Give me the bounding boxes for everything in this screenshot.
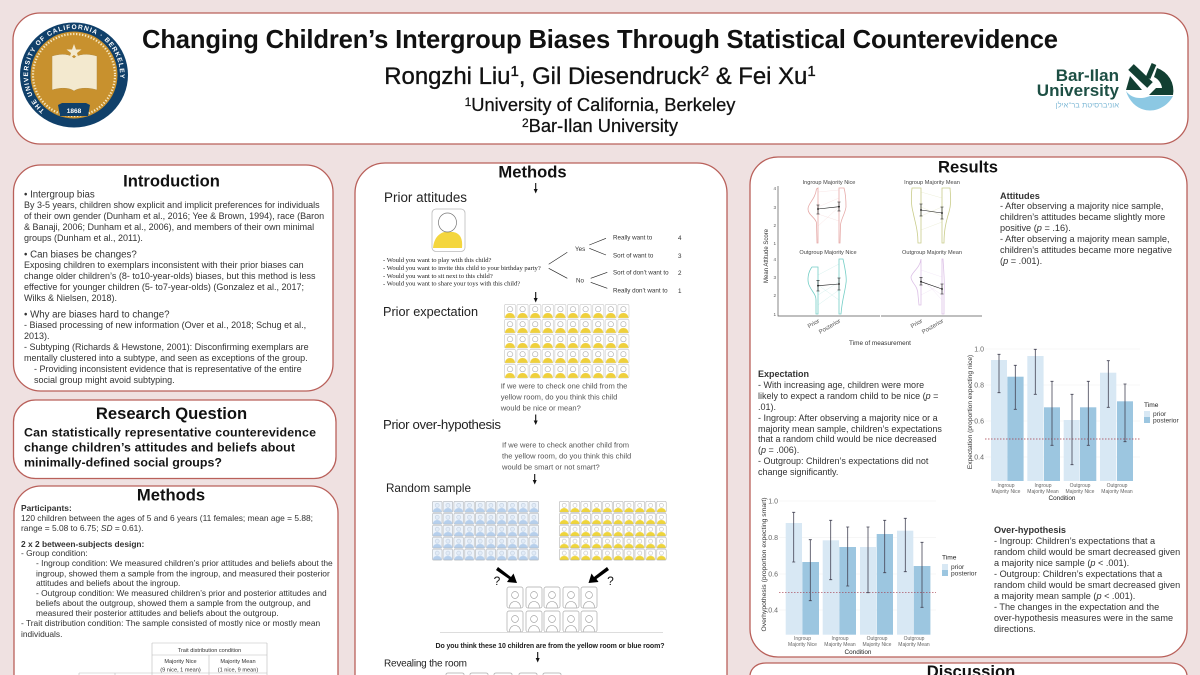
means and error bars: [816, 202, 944, 294]
y axis ticks: 1: [773, 241, 776, 246]
diagram: response scale tree: Really don’t want to: [613, 288, 668, 294]
text block: intergroup bias: groups (Dunham et al., 2011).: [24, 233, 143, 243]
legend: prior: [951, 564, 965, 571]
authors: , Gil Diesendruck: [519, 63, 701, 90]
y axis label: Mean Attitude Score: [764, 228, 770, 283]
text block: expectation results: change significantly.: [758, 467, 838, 477]
text block: over-hypothesis results: a majority mean sample (p < .001).: [994, 591, 1135, 601]
authors: 1: [510, 63, 519, 80]
legend: posterior: [1153, 418, 1179, 424]
category labels: Ingroup: [998, 483, 1015, 489]
category labels: Majority Nice: [788, 642, 817, 648]
legend: Time: [942, 554, 957, 562]
x axis tick labels: Posterior: [921, 319, 945, 336]
authors: Rongzhi Liu: [384, 63, 510, 90]
y axis ticks: 2: [773, 223, 776, 228]
text block: attitudes results: - After observing a majority nice sample,: [1000, 201, 1163, 211]
text block: attitude questions: - Would you want to play with this child?: [383, 257, 492, 264]
diagram: response scale tree: Yes: [575, 246, 585, 253]
label: random sample: Random sample: [386, 482, 471, 495]
panel: methods procedure: [355, 162, 727, 675]
category labels: Majority Nice: [863, 642, 892, 648]
y ticks: 0.8: [974, 382, 984, 390]
diagram: response scale tree: Really want to: [613, 234, 653, 242]
faint participant lines: [818, 190, 942, 305]
x axis label: Time of measurement: [849, 340, 911, 347]
diagram: response scale tree: [549, 234, 682, 295]
icon: child portrait: [432, 209, 465, 252]
y axis ticks: 2: [773, 293, 776, 298]
label: prior expectation: Prior expectation: [383, 305, 478, 319]
panel: results: [750, 157, 1187, 657]
panel: poster header: [12, 12, 1189, 145]
label: revealing the room: Revealing the room: [384, 658, 467, 670]
text block: attitudes results: [1000, 191, 1172, 266]
text block: design: measured their posterior attitudes and beliefs about the outgroup.: [36, 608, 279, 618]
heading: methods left: Methods: [137, 486, 205, 504]
text block: over-hypothesis results: Over-hypothesis: [994, 525, 1066, 535]
arrow: to revealing the room: [536, 652, 540, 662]
arrow: from yellow room: [588, 567, 609, 583]
icon: Bar-Ilan University logo: University: [1037, 81, 1120, 100]
table: trait distribution condition: [79, 643, 267, 675]
authors: 2: [701, 63, 709, 80]
text block: design: - Ingroup condition: We measured children’s prior attitudes and beliefs about the: [36, 558, 333, 568]
title: Changing Children’s Intergroup Biases Through Statistical Counterevidence: [142, 26, 1058, 54]
text block: why biases are hard to change: social group might avoid subtyping.: [34, 375, 175, 385]
text block: why biases are hard to change: [24, 310, 309, 385]
text block: over-hypothesis question: If we were to check another child from: [502, 440, 629, 450]
category labels: Outgroup: [1070, 483, 1091, 489]
y ticks: 0.4: [974, 454, 984, 462]
text block: intergroup bias: • Intergroup bias: [24, 190, 95, 200]
panel: introduction: [14, 165, 333, 391]
text block: can biases be changed: Exposing children to exemplars inconsistent with their prior biases can: [24, 260, 304, 270]
text block: attitudes results: Attitudes: [1000, 191, 1040, 201]
chart: expectation bar chart: [967, 346, 1179, 502]
heading: results: Results: [938, 158, 998, 176]
icon: UC Berkeley seal: 1868: [67, 108, 82, 115]
y axis ticks: 3: [773, 275, 776, 280]
text block: design: [21, 539, 333, 639]
text block: expectation question: If we were to check one child from the: [501, 382, 627, 390]
text block: why biases are hard to change: - Providing inconsistent evidence that is representative of the entire: [34, 364, 302, 374]
text block: can biases be changed: • Can biases be changes?: [24, 250, 137, 260]
category labels: Outgroup: [904, 636, 925, 642]
text block: over-hypothesis question: [501, 440, 631, 472]
x axis label: Condition: [844, 649, 872, 656]
text block: design: - Outgroup condition: We measured children’s prior and posterior attitudes and: [36, 588, 327, 598]
text block: expectation results: - With increasing age, children were more: [758, 380, 924, 390]
text block: research question: Can statistically representative counterevidence: [24, 426, 316, 440]
text block: expectation question: yellow room, do you think this child: [501, 392, 617, 402]
x axis tick labels: Posterior: [818, 319, 842, 336]
table: trait distribution condition: (9 nice, 1 mean): [160, 668, 201, 674]
category labels: Majority Mean: [898, 642, 930, 648]
icon grid: yellow room sample: [559, 501, 667, 561]
text block: over-hypothesis results: - Ingroup: Children’s expectations that a: [994, 536, 1156, 546]
text block: research question: change children’s attitudes and beliefs about: [24, 440, 295, 454]
diagram: response scale tree: 3: [678, 253, 682, 260]
table: trait distribution condition: Majority Mean: [220, 659, 256, 665]
table: trait distribution condition: Trait distribution condition: [178, 648, 241, 654]
arrow: to random sample: [533, 474, 537, 484]
y ticks: 0.6: [974, 418, 984, 426]
text block: design: 2 x 2 between-subjects design:: [21, 539, 144, 549]
y ticks: 1.0: [768, 498, 778, 506]
legend: [1144, 402, 1179, 424]
icon grid: ten sampled children: [507, 587, 597, 632]
text block: intergroup bias: [24, 190, 324, 243]
text block: attitudes results: positive (p = .16).: [1000, 223, 1071, 233]
panel: discussion: [750, 662, 1187, 675]
category labels: Outgroup: [867, 636, 888, 642]
text block: can biases be changed: change older children’s (8- to10-year-olds) biases, but this method is less: [24, 271, 316, 281]
y axis ticks: 1: [773, 312, 776, 317]
panel titles: Outgroup Majority Nice: [799, 250, 857, 256]
affiliation: Berkeley: 1: [465, 95, 472, 109]
category labels: Outgroup: [1107, 483, 1128, 489]
category labels: Majority Nice: [992, 489, 1021, 495]
text block: over-hypothesis results: random child would be smart decreased given: [994, 547, 1180, 557]
y ticks: 0.8: [768, 535, 778, 542]
icon grid: blue room children: [432, 501, 540, 561]
x axis tick labels: Prior: [910, 319, 924, 330]
text block: attitude questions: [383, 257, 541, 288]
text block: attitudes results: children’s attitudes became more negative: [1000, 245, 1172, 255]
category labels: Majority Mean: [1101, 489, 1133, 495]
affiliation: Berkeley: University of California, Berkeley: [471, 94, 736, 115]
text block: design: beliefs about the outgroup, showed them a sample from the outgroup, and: [36, 598, 311, 608]
heading: methods procedure: Methods: [498, 162, 567, 182]
text block: over-hypothesis question: the yellow room, do you think this child: [502, 452, 631, 460]
y axis ticks: 4: [773, 257, 776, 262]
text block: expectation question: would be nice or mean?: [500, 404, 581, 412]
text block: over-hypothesis question: would be smart or not smart?: [501, 462, 600, 472]
affiliation: Bar-Ilan: 2: [522, 116, 529, 130]
y axis label: Expectation (proportion expecting nice): [967, 355, 974, 469]
text block: expectation results: likely to expect a random child to be nice (p =: [758, 391, 938, 401]
category labels: Ingroup: [832, 636, 849, 642]
heading: research question: Research Question: [96, 404, 247, 423]
text block: research question: [24, 426, 316, 470]
text block: over-hypothesis results: [994, 525, 1180, 634]
y axis ticks: 3: [773, 205, 776, 210]
arrow: to prior expectation: [534, 292, 538, 302]
text block: can biases be changed: Wilks & Nielsen, 2018).: [24, 293, 117, 303]
icon: Bar-Ilan University logo: [1037, 64, 1173, 110]
table: trait distribution condition: Majority Nice: [164, 659, 197, 665]
arrow: to prior attitudes: [534, 183, 538, 194]
category labels: Majority Mean: [1027, 489, 1059, 495]
text block: expectation results: Expectation: [758, 369, 809, 379]
diagram: response scale tree: 1: [678, 288, 682, 295]
label: question mark left: ?: [494, 574, 501, 588]
legend: Time: [1144, 402, 1159, 409]
text block: expectation results: (p = .006).: [758, 445, 799, 455]
y axis label: Overhypothesis (proportion expecting smart): [761, 497, 768, 632]
text block: over-hypothesis results: - The changes in the expectation and the: [994, 602, 1159, 612]
legend: posterior: [951, 570, 977, 578]
text block: can biases be changed: effective for younger children (5- to7-year-olds) (Gonzalez et al., 2017;: [24, 282, 304, 292]
diagram: response scale tree: No: [576, 278, 585, 284]
text block: expectation results: - Outgroup: Children’s expectations did not: [758, 456, 929, 466]
arrow: to prior over-hypothesis: [534, 414, 538, 425]
text block: expectation results: that a random child would be nice decreased: [758, 434, 937, 444]
text block: intergroup bias: of their own gender (Dunham et al., 2016; Yee & Brown, 1994), race (Baron: [24, 211, 324, 221]
text block: expectation results: .01).: [758, 402, 776, 412]
category labels: [788, 636, 930, 648]
text block: participants: Participants:: [21, 503, 72, 513]
chart: over-hypothesis bar chart: [761, 497, 977, 656]
panel: methods left: [14, 486, 338, 675]
text block: participants: [21, 503, 313, 533]
text block: attitude questions: - Would you want to sit next to this child?: [383, 273, 493, 280]
heading: introduction: Introduction: [123, 172, 220, 190]
icon: Bar-Ilan University logo: אוניברסיטת בר־אילן: [1056, 100, 1119, 110]
panel titles: Ingroup Majority Nice: [803, 180, 855, 186]
text block: participants: 120 children between the ages of 5 and 6 years (11 females; mean age = 5.88;: [21, 513, 313, 523]
text block: over-hypothesis results: random child would be smart decreased given: [994, 580, 1180, 590]
text block: over-hypothesis results: over-hypothesis measures were in the same: [994, 613, 1173, 623]
authors: 1: [807, 63, 816, 80]
text block: research question: minimally-defined social groups?: [24, 456, 222, 470]
text block: why biases are hard to change: mentally clustered into a subtype, and seen as exceptions of the group.: [24, 353, 308, 363]
text block: attitudes results: (p = .001).: [1000, 256, 1042, 266]
y axis ticks: 4: [773, 186, 776, 191]
table: trait distribution condition: (1 nice, 9 mean): [218, 668, 258, 674]
icon: Bar-Ilan University logo: Bar-Ilan: [1056, 66, 1119, 85]
diagram: response scale tree: Sort of want to: [613, 252, 654, 260]
text block: attitudes results: - After observing a majority mean sample,: [1000, 234, 1170, 244]
icon grid: yellow room children: [504, 304, 630, 379]
text block: expectation results: [758, 369, 942, 477]
panel titles: Outgroup Majority Mean: [902, 250, 962, 256]
diagram: response scale tree: Sort of don’t want to: [613, 270, 669, 276]
y axis ticks: [773, 186, 776, 317]
x axis tick labels: [807, 319, 945, 336]
label: prior over-hypothesis: Prior over-hypothesis: [383, 417, 501, 432]
text block: design: - Trait distribution condition: The sample consisted of mostly nice or mostly mean: [21, 618, 320, 628]
category labels: Ingroup: [1035, 483, 1052, 489]
authors: & Fei Xu: [709, 63, 807, 90]
icon: UC Berkeley seal: THE UNIVERSITY OF CALIFORNIA · BERKELEY: [23, 24, 125, 114]
icon grid: revealed children: [446, 673, 561, 675]
text block: design: attitudes and beliefs about the ingroup.: [36, 578, 180, 588]
text block: why biases are hard to change: • Why are biases hard to change?: [24, 310, 170, 320]
text block: design: ingroup, showed them a sample from the ingroup, and measured their posterior: [36, 568, 330, 578]
y ticks: [974, 346, 984, 462]
category labels: Ingroup: [794, 636, 811, 642]
text block: expectation results: - Ingroup: After observing a majority nice or a: [758, 413, 938, 423]
text block: over-hypothesis results: directions.: [994, 624, 1036, 634]
text block: attitudes results: children’s attitudes became slightly more: [1000, 212, 1165, 222]
text block: attitude questions: - Would you want to share your toys with this child?: [383, 280, 520, 288]
y ticks: 0.4: [768, 608, 778, 614]
panel titles: [799, 180, 962, 256]
text block: design: individuals.: [21, 629, 62, 639]
text block: participants: range = 5.08 to 6.75; SD = 0.61).: [21, 523, 143, 533]
panel titles: Ingroup Majority Mean: [904, 180, 960, 186]
legend: [942, 554, 977, 578]
text block: over-hypothesis results: - Outgroup: Children’s expectations that a: [994, 569, 1163, 579]
label: question mark right: ?: [607, 574, 614, 588]
text block: room question: Do you think these 10 children are from the yellow room or blue room?: [436, 643, 664, 650]
category labels: [992, 483, 1133, 495]
text block: can biases be changed: [24, 250, 316, 303]
arrow: from blue room: [496, 567, 517, 583]
category labels: Majority Nice: [1066, 489, 1095, 495]
text block: intergroup bias: By 3-5 years, children show explicit and implicit preferences for individuals: [24, 200, 320, 210]
diagram: response scale tree: 4: [678, 235, 682, 242]
category labels: Majority Mean: [824, 642, 856, 648]
text block: intergroup bias: & Banaji, 2006; Dunham et al., 2006), and members of their own minimal: [24, 222, 314, 232]
panel: research question: [14, 400, 336, 478]
x axis label: Condition: [1048, 495, 1076, 502]
text block: expectation question: [500, 382, 627, 412]
text block: why biases are hard to change: 2013).: [24, 331, 50, 341]
y ticks: 1.0: [974, 346, 984, 354]
label: prior attitudes: Prior attitudes: [384, 190, 467, 205]
x axis tick labels: Prior: [807, 319, 821, 330]
text block: why biases are hard to change: - Subtyping (Richards & Hewstone, 2001): Disconfirming exemplars are: [24, 342, 309, 352]
text block: why biases are hard to change: - Biased processing of new information (Over et al., 2018; Schug et al.,: [24, 320, 306, 330]
text block: expectation results: majority mean sample, children’s expectations: [758, 424, 942, 434]
y ticks: [768, 498, 778, 614]
text block: attitude questions: - Would you want to invite this child to your birthday party?: [383, 265, 541, 272]
chart: attitude violin plots: [764, 180, 982, 347]
affiliation: Bar-Ilan: Bar-Ilan University: [529, 115, 679, 136]
diagram: response scale tree: 2: [678, 270, 682, 277]
y ticks: 0.6: [768, 572, 778, 578]
text block: design: - Group condition:: [21, 548, 88, 558]
legend: prior: [1153, 411, 1167, 418]
text block: over-hypothesis results: a majority nice sample (p < .001).: [994, 558, 1129, 568]
